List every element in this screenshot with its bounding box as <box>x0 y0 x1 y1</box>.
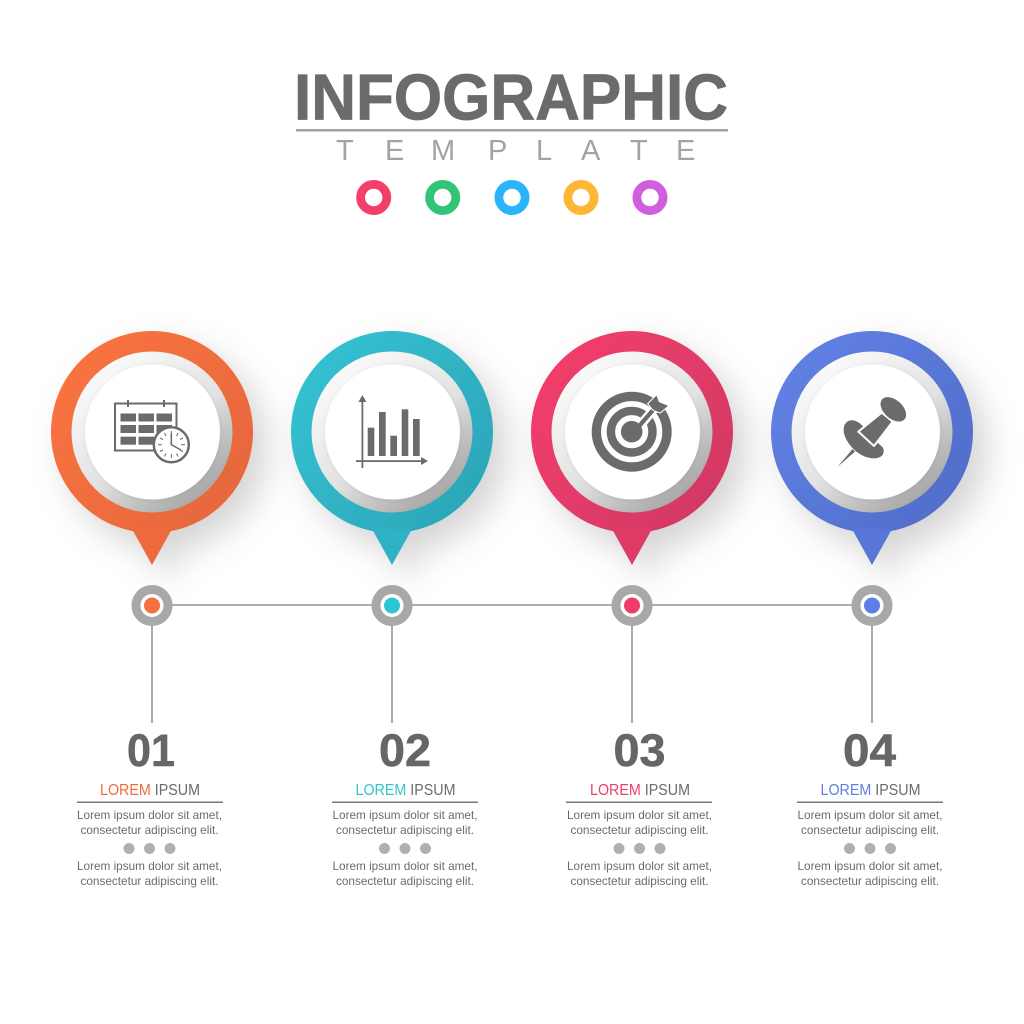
step 2 text: consectetur adipiscing elit. <box>336 823 474 837</box>
title: INFOGRAPHIC <box>294 60 728 134</box>
colour dots <box>361 184 663 211</box>
icon: push pin <box>837 392 911 467</box>
step 3 text: 03 <box>614 725 666 776</box>
step 1 text: consectetur adipiscing elit. <box>80 874 218 888</box>
step 2 text: Lorem ipsum dolor sit amet, <box>332 808 478 822</box>
step 1 text: 01 <box>127 725 175 776</box>
pin 4: blue <box>771 331 973 565</box>
step 4 text: Lorem ipsum dolor sit amet, <box>798 859 942 873</box>
title underline <box>296 129 728 132</box>
step 4 text: 04 <box>843 725 896 776</box>
step 2 text: consectetur adipiscing elit. <box>336 874 474 888</box>
step 4 text: Lorem ipsum dolor sit amet, <box>798 808 942 822</box>
pin 1: orange <box>51 331 253 565</box>
step 4 text <box>797 725 943 888</box>
pin 2: teal <box>291 331 493 565</box>
pin 3: crimson <box>531 331 733 565</box>
timeline connector <box>152 605 872 723</box>
icon: bar chart <box>356 395 428 468</box>
step 4 text: consectetur adipiscing elit. <box>801 823 939 837</box>
step 2 text <box>332 725 478 888</box>
step 1 text: Lorem ipsum dolor sit amet, <box>77 808 222 822</box>
icon: calendar and clock <box>115 400 189 462</box>
step 3 text: consectetur adipiscing elit. <box>570 874 708 888</box>
step 3 text: consectetur adipiscing elit. <box>570 823 708 837</box>
step 3 text: Lorem ipsum dolor sit amet, <box>567 808 712 822</box>
step 1 text: Lorem ipsum dolor sit amet, <box>77 859 222 873</box>
icon: target with dart <box>596 395 669 467</box>
step 1 text: LOREM IPSUM <box>100 782 200 799</box>
step 2 text: 02 <box>379 725 431 776</box>
step 3 text: Lorem ipsum dolor sit amet, <box>567 859 712 873</box>
step 3 text: LOREM IPSUM <box>590 782 690 799</box>
step 4 text: consectetur adipiscing elit. <box>801 874 939 888</box>
step 2 text: LOREM IPSUM <box>356 782 456 799</box>
step 3 text <box>566 725 712 888</box>
step 2 text: Lorem ipsum dolor sit amet, <box>332 859 478 873</box>
step 1 text <box>77 725 223 888</box>
step 1 text: consectetur adipiscing elit. <box>80 823 218 837</box>
subtitle: TEMPLATE <box>336 135 695 167</box>
timeline nodes <box>136 590 888 622</box>
step 4 text: LOREM IPSUM <box>820 782 920 799</box>
